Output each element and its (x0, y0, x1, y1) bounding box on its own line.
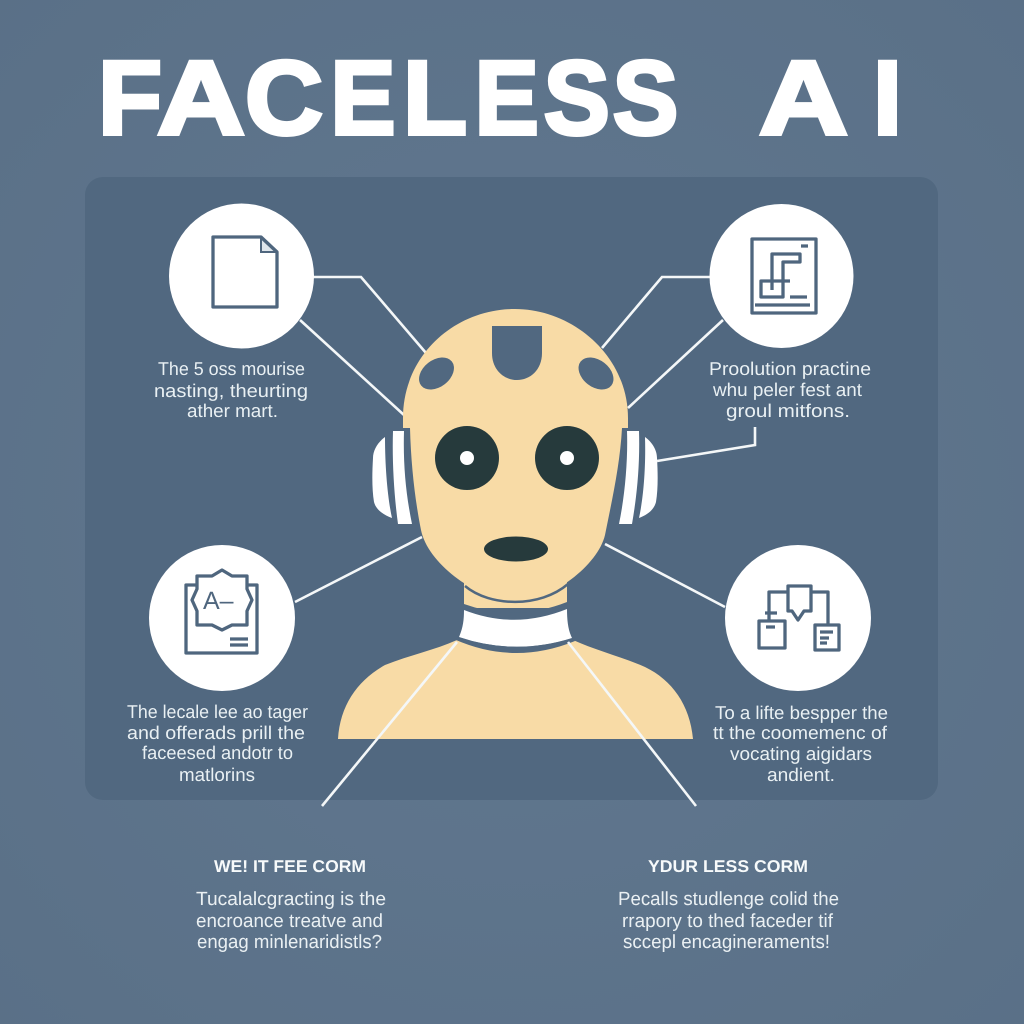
title: F (98, 40, 162, 157)
text: top-right description: groul mitfons. (726, 400, 850, 421)
panel: bottom-left item (127, 545, 308, 785)
text: top-right description (709, 358, 871, 421)
text block: lower left: WE! IT FEE CORM (214, 857, 366, 876)
head vents (413, 351, 620, 396)
text block: lower left: engag minlenaridistls? (197, 932, 382, 953)
robot figure (338, 309, 693, 739)
title: L (403, 40, 467, 157)
head slot (492, 326, 542, 380)
panel: top-left item (154, 204, 314, 421)
text block: lower right: YDUR LESS CORM (648, 857, 808, 876)
text: bottom-right description: To a lifte bespper the (715, 702, 888, 723)
text: top-left description: nasting, theurting (154, 380, 308, 401)
text block: lower right: rrapory to thed faceder tif (622, 911, 834, 932)
title: S (544, 40, 610, 157)
title: E (475, 40, 539, 157)
ear: right (619, 431, 658, 524)
head (403, 309, 628, 601)
text: bottom-left description: faceesed andotr to (142, 742, 293, 763)
text: bottom-right description: vocating aigidars (730, 743, 872, 764)
text block: lower left: Tucalalcgracting is the (196, 889, 386, 910)
connector lines (295, 277, 755, 607)
title (98, 40, 902, 157)
collar (456, 602, 575, 653)
text: bottom-left description: matlorins (179, 764, 255, 785)
icon: document (169, 204, 314, 348)
title: A (759, 40, 848, 157)
icon: framed diagram (710, 204, 854, 348)
text: bottom-right description: andient. (767, 764, 835, 785)
text: top-left description (154, 358, 308, 421)
title: S (613, 40, 678, 157)
text: top-right description: whu peler fest ant (712, 379, 862, 400)
jaw line (465, 584, 568, 602)
text block: lower right: Pecalls studlenge colid the (618, 889, 839, 910)
connector lines: lower (322, 642, 696, 806)
mouth (484, 536, 548, 562)
text block: lower left: encroance treatve and (196, 911, 383, 932)
neck (464, 580, 567, 608)
eye: left (435, 426, 499, 490)
ear: left (372, 431, 412, 524)
title: I (873, 40, 902, 157)
panel: main (85, 177, 938, 800)
icon: A badge card (149, 545, 295, 691)
eye: right (535, 426, 599, 490)
text: bottom-left description: and offerads prill the (127, 722, 305, 743)
text: bottom-right description: tt the coomemenc of (713, 722, 888, 743)
text: bottom-left description: The lecale lee ao tager (127, 701, 308, 722)
text block: lower right: sccepl encagineraments! (623, 932, 830, 953)
panel: top-right item (709, 204, 871, 421)
icon: connected documents (725, 545, 871, 691)
title: E (330, 40, 396, 157)
text block: lower left (196, 857, 386, 953)
title: C (245, 40, 323, 157)
panel: bottom-right item (713, 545, 888, 785)
text: bottom-left description (127, 701, 308, 785)
text: bottom-right description (713, 702, 888, 785)
text: top-right description: Proolution practine (709, 358, 871, 379)
text: top-left description: ather mart. (187, 400, 278, 421)
text: top-left description: The 5 oss mourise (158, 358, 305, 379)
icon: A badge card: A– (203, 587, 234, 615)
text block: lower right (618, 857, 839, 953)
shoulders (338, 640, 693, 739)
title: A (157, 40, 245, 157)
